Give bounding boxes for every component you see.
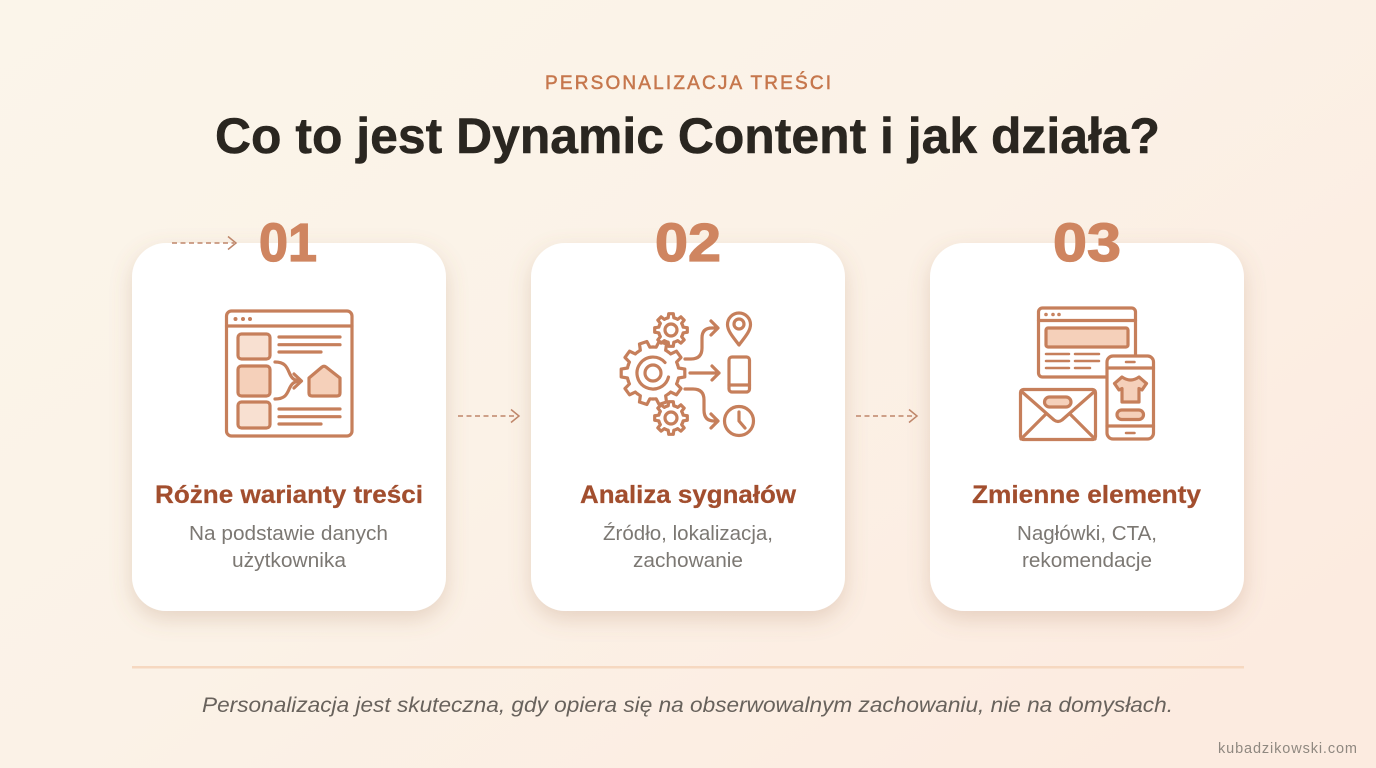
panel: step 2: [531, 213, 845, 611]
description: Nagłówki, CTA,: [1017, 523, 1157, 545]
arrow: lead-in to step 1: [172, 236, 236, 250]
panel: step 1: [132, 213, 446, 611]
heading: Różne warianty treści: [155, 481, 423, 509]
eyebrow label: PERSONALIZACJA TREŚCI: [545, 72, 831, 94]
description: rekomendacje: [1022, 550, 1152, 572]
heading: Analiza sygnałów: [580, 481, 797, 509]
icon: web page with content variants: [226, 311, 352, 436]
closing statement: Personalizacja jest skuteczna, gdy opiera się na obserwowalnym zachowaniu, nie na domysłach.: [202, 693, 1173, 717]
description: użytkownika: [232, 550, 347, 572]
arrow: step 2 to step 3: [856, 410, 917, 422]
icon: gears routing signals: [621, 313, 754, 436]
description: [603, 522, 773, 572]
panel: step 3: [930, 213, 1244, 611]
description: [189, 523, 388, 572]
description: Na podstawie danych: [189, 523, 388, 545]
arrow: step 1 to step 2: [458, 410, 519, 422]
number 02: 02: [655, 213, 721, 273]
description: zachowanie: [633, 550, 743, 572]
number 01: 01: [259, 213, 317, 273]
icon: web page, email and phone: [1020, 308, 1154, 440]
watermark: kubadzikowski.com: [1218, 741, 1357, 757]
description: [1017, 523, 1157, 572]
heading: Zmienne elementy: [972, 481, 1201, 509]
title: Co to jest Dynamic Content i jak działa?: [215, 108, 1160, 164]
description: Źródło, lokalizacja,: [603, 522, 773, 545]
number 03: 03: [1053, 213, 1121, 273]
